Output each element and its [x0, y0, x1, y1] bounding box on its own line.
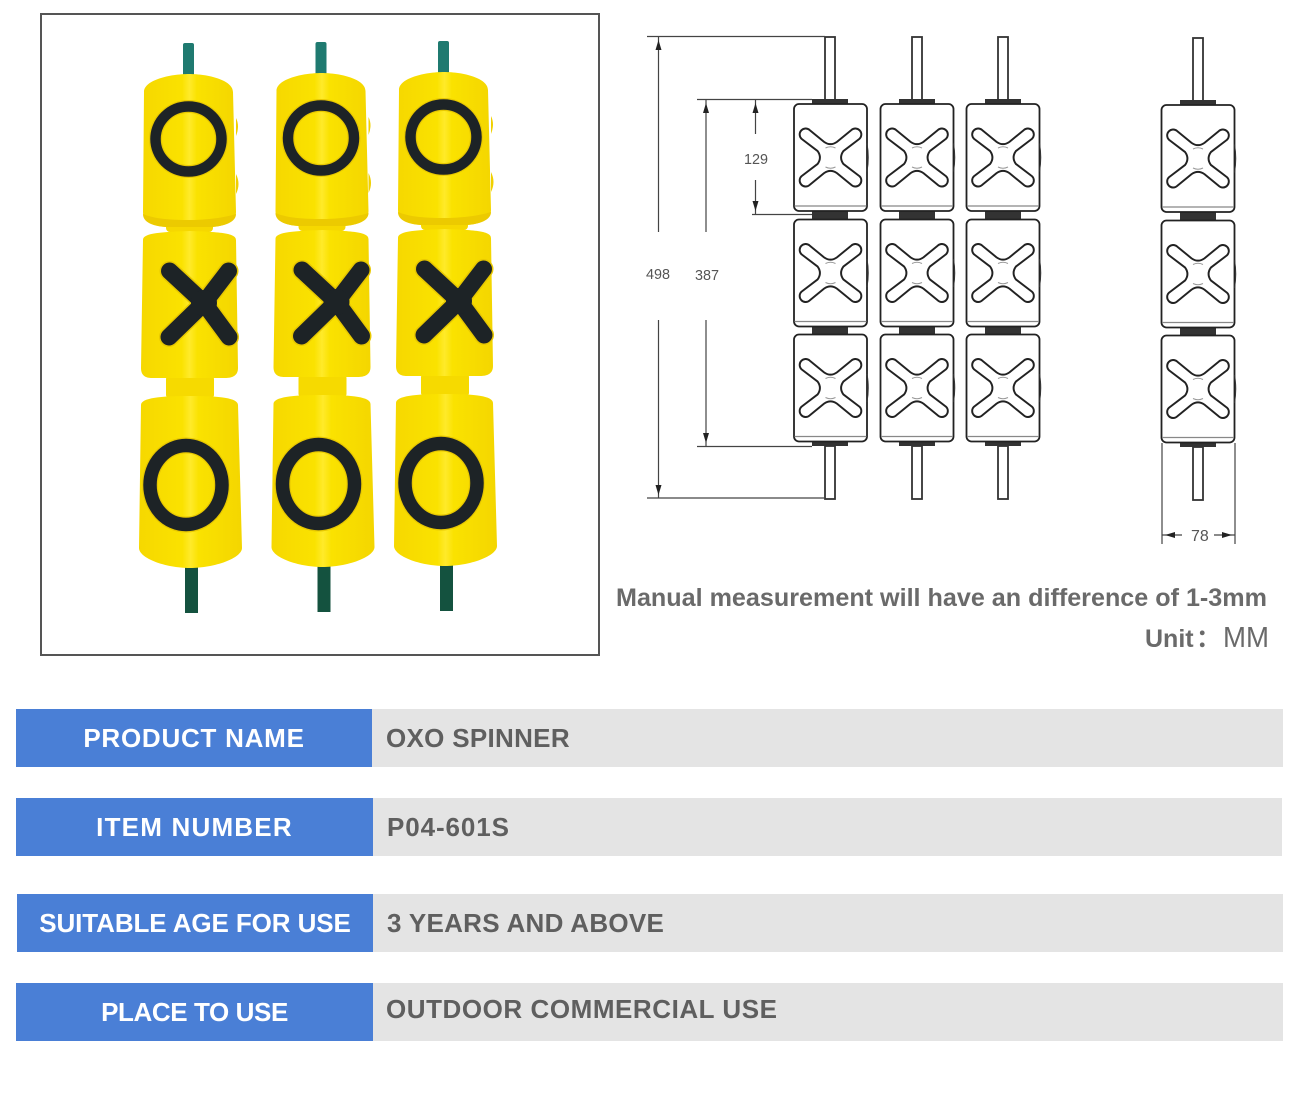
- row: suitable age: [17, 894, 1283, 952]
- dimension drawing: 387: [695, 267, 719, 284]
- text: 3 YEARS AND ABOVE: [387, 908, 664, 938]
- spinner 3: [394, 41, 497, 611]
- dimension drawing: 498: [646, 266, 670, 283]
- measurement note: MM: [1223, 622, 1269, 654]
- row: product name: [16, 709, 1283, 767]
- measurement note: Manual measurement will have an difference of 1-3mm: [616, 584, 1267, 612]
- spinner 2: [272, 42, 374, 612]
- text: PRODUCT NAME: [83, 723, 305, 753]
- spinner 1: [139, 43, 242, 613]
- text: SUITABLE AGE FOR USE: [39, 908, 351, 938]
- row: place to use: [16, 983, 1283, 1041]
- text: PLACE TO USE: [101, 997, 288, 1027]
- dimension drawing: 129: [744, 151, 768, 168]
- photo panel: [41, 14, 599, 655]
- row: item number: [16, 798, 1282, 856]
- text: P04-601S: [387, 812, 510, 842]
- dimension drawing: 78: [1191, 528, 1209, 545]
- text: OXO SPINNER: [386, 723, 570, 753]
- text: ITEM NUMBER: [96, 812, 293, 842]
- measurement note: Unit: [1145, 625, 1194, 653]
- dimension drawing: [646, 36, 1236, 545]
- measurement note: ：: [1196, 625, 1221, 653]
- text: OUTDOOR COMMERCIAL USE: [386, 994, 778, 1024]
- measurement note: [616, 584, 1269, 654]
